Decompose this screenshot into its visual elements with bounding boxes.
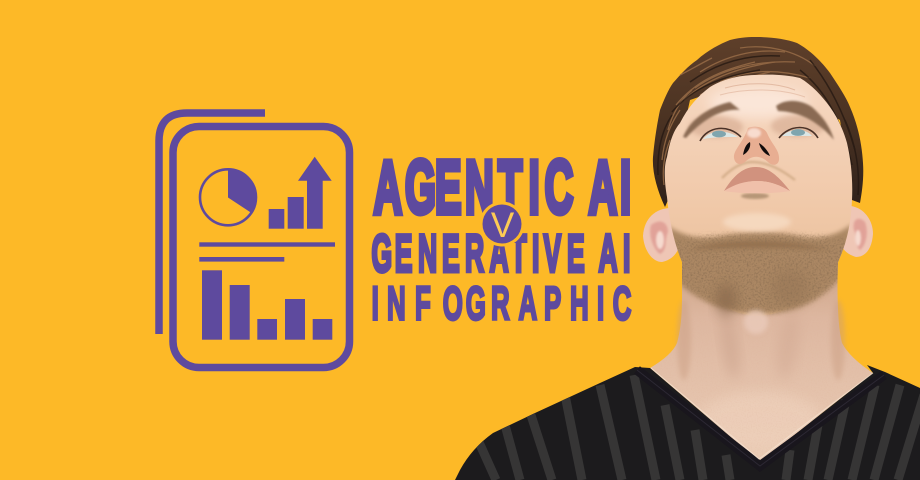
face — [664, 74, 852, 262]
title line: Infographic: INFOGRAPHIC — [372, 279, 631, 331]
nose — [734, 127, 779, 165]
right eye — [779, 128, 818, 138]
shirt — [455, 365, 920, 480]
front page outline — [173, 126, 350, 368]
bottom bar chart — [202, 270, 332, 340]
left eye — [700, 128, 741, 141]
moustache shadow — [722, 162, 795, 180]
collar — [637, 370, 884, 466]
left ear — [643, 208, 680, 262]
eye socket shadows — [689, 116, 743, 138]
pie chart — [200, 168, 257, 225]
lips — [724, 167, 790, 193]
text lines — [199, 242, 335, 262]
versus badge: V — [491, 206, 515, 245]
right ear — [840, 206, 873, 257]
right eyebrow — [776, 101, 834, 140]
left eyebrow — [683, 102, 740, 138]
versus badge — [480, 202, 524, 246]
forehead highlight — [708, 86, 808, 118]
hair — [653, 37, 863, 207]
icon: report document with charts — [159, 113, 350, 368]
chin tuft — [741, 193, 769, 199]
hair strands — [662, 47, 815, 185]
title line: Agentic AI: AGENTIC AI — [373, 146, 631, 229]
photo: man looking upward — [455, 37, 920, 480]
rising bars with arrow — [269, 157, 332, 229]
beard — [668, 213, 852, 334]
forehead creases — [725, 84, 795, 90]
back page outline — [159, 113, 265, 334]
title — [372, 146, 631, 331]
neck — [650, 255, 873, 462]
title line: Generative AI: GENERATIVE AI — [372, 223, 630, 283]
